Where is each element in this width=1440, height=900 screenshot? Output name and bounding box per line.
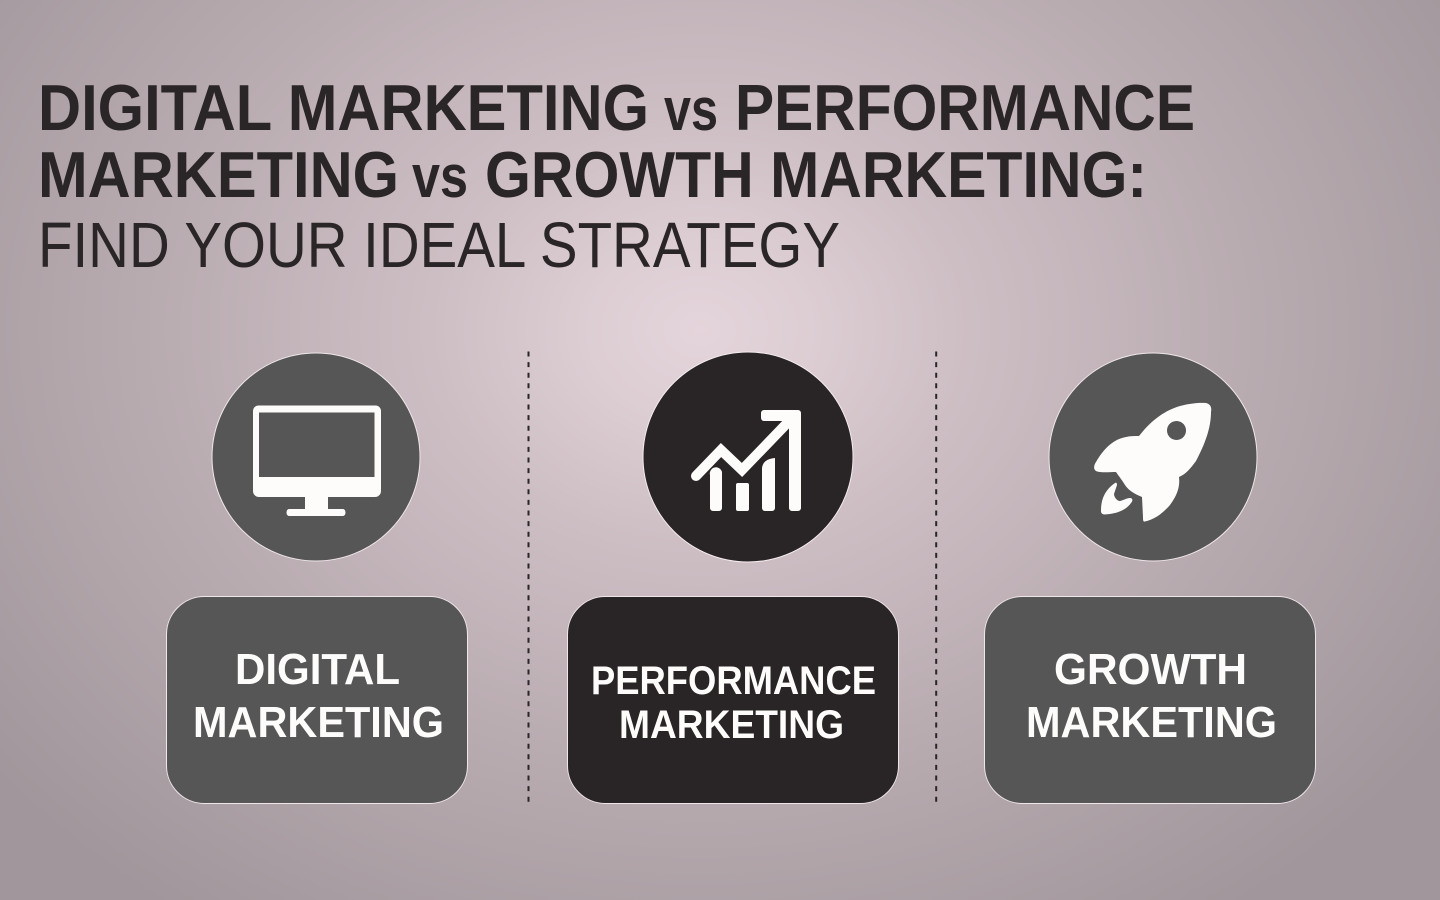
- title line 1: PERFORMANCE: [735, 71, 1195, 144]
- column: digital marketing: [166, 353, 468, 804]
- divider left: [528, 352, 530, 806]
- label box: growth marketing: MARKETING: [1026, 698, 1277, 747]
- title line 2: [38, 138, 1147, 211]
- label box: performance marketing: PERFORMANCE: [591, 659, 876, 703]
- label box: digital marketing: DIGITAL: [235, 645, 400, 694]
- title: [38, 71, 1195, 281]
- title line 2: vs: [412, 143, 468, 210]
- title line 1: vs: [664, 76, 718, 143]
- label box: performance marketing: MARKETING: [619, 703, 844, 747]
- icon: monitor in circle: [212, 353, 420, 561]
- column: performance marketing: [568, 352, 898, 804]
- icon: rocket in circle: [1049, 353, 1257, 561]
- column: growth marketing: [984, 353, 1316, 804]
- title line 1: DIGITAL MARKETING: [38, 71, 649, 144]
- label box: performance marketing: [568, 596, 898, 804]
- label box: growth marketing: [984, 596, 1316, 804]
- title line 2: MARKETING: [38, 138, 399, 211]
- title line 2: GROWTH MARKETING:: [485, 138, 1147, 211]
- label box: digital marketing: MARKETING: [193, 698, 444, 747]
- icon: growth chart in circle: [643, 352, 853, 562]
- label box: digital marketing: [166, 596, 468, 804]
- title line 1: [38, 71, 1195, 144]
- divider right: [935, 352, 937, 806]
- title line 3: FIND YOUR IDEAL STRATEGY: [38, 209, 840, 281]
- label box: growth marketing: GROWTH: [1054, 645, 1247, 694]
